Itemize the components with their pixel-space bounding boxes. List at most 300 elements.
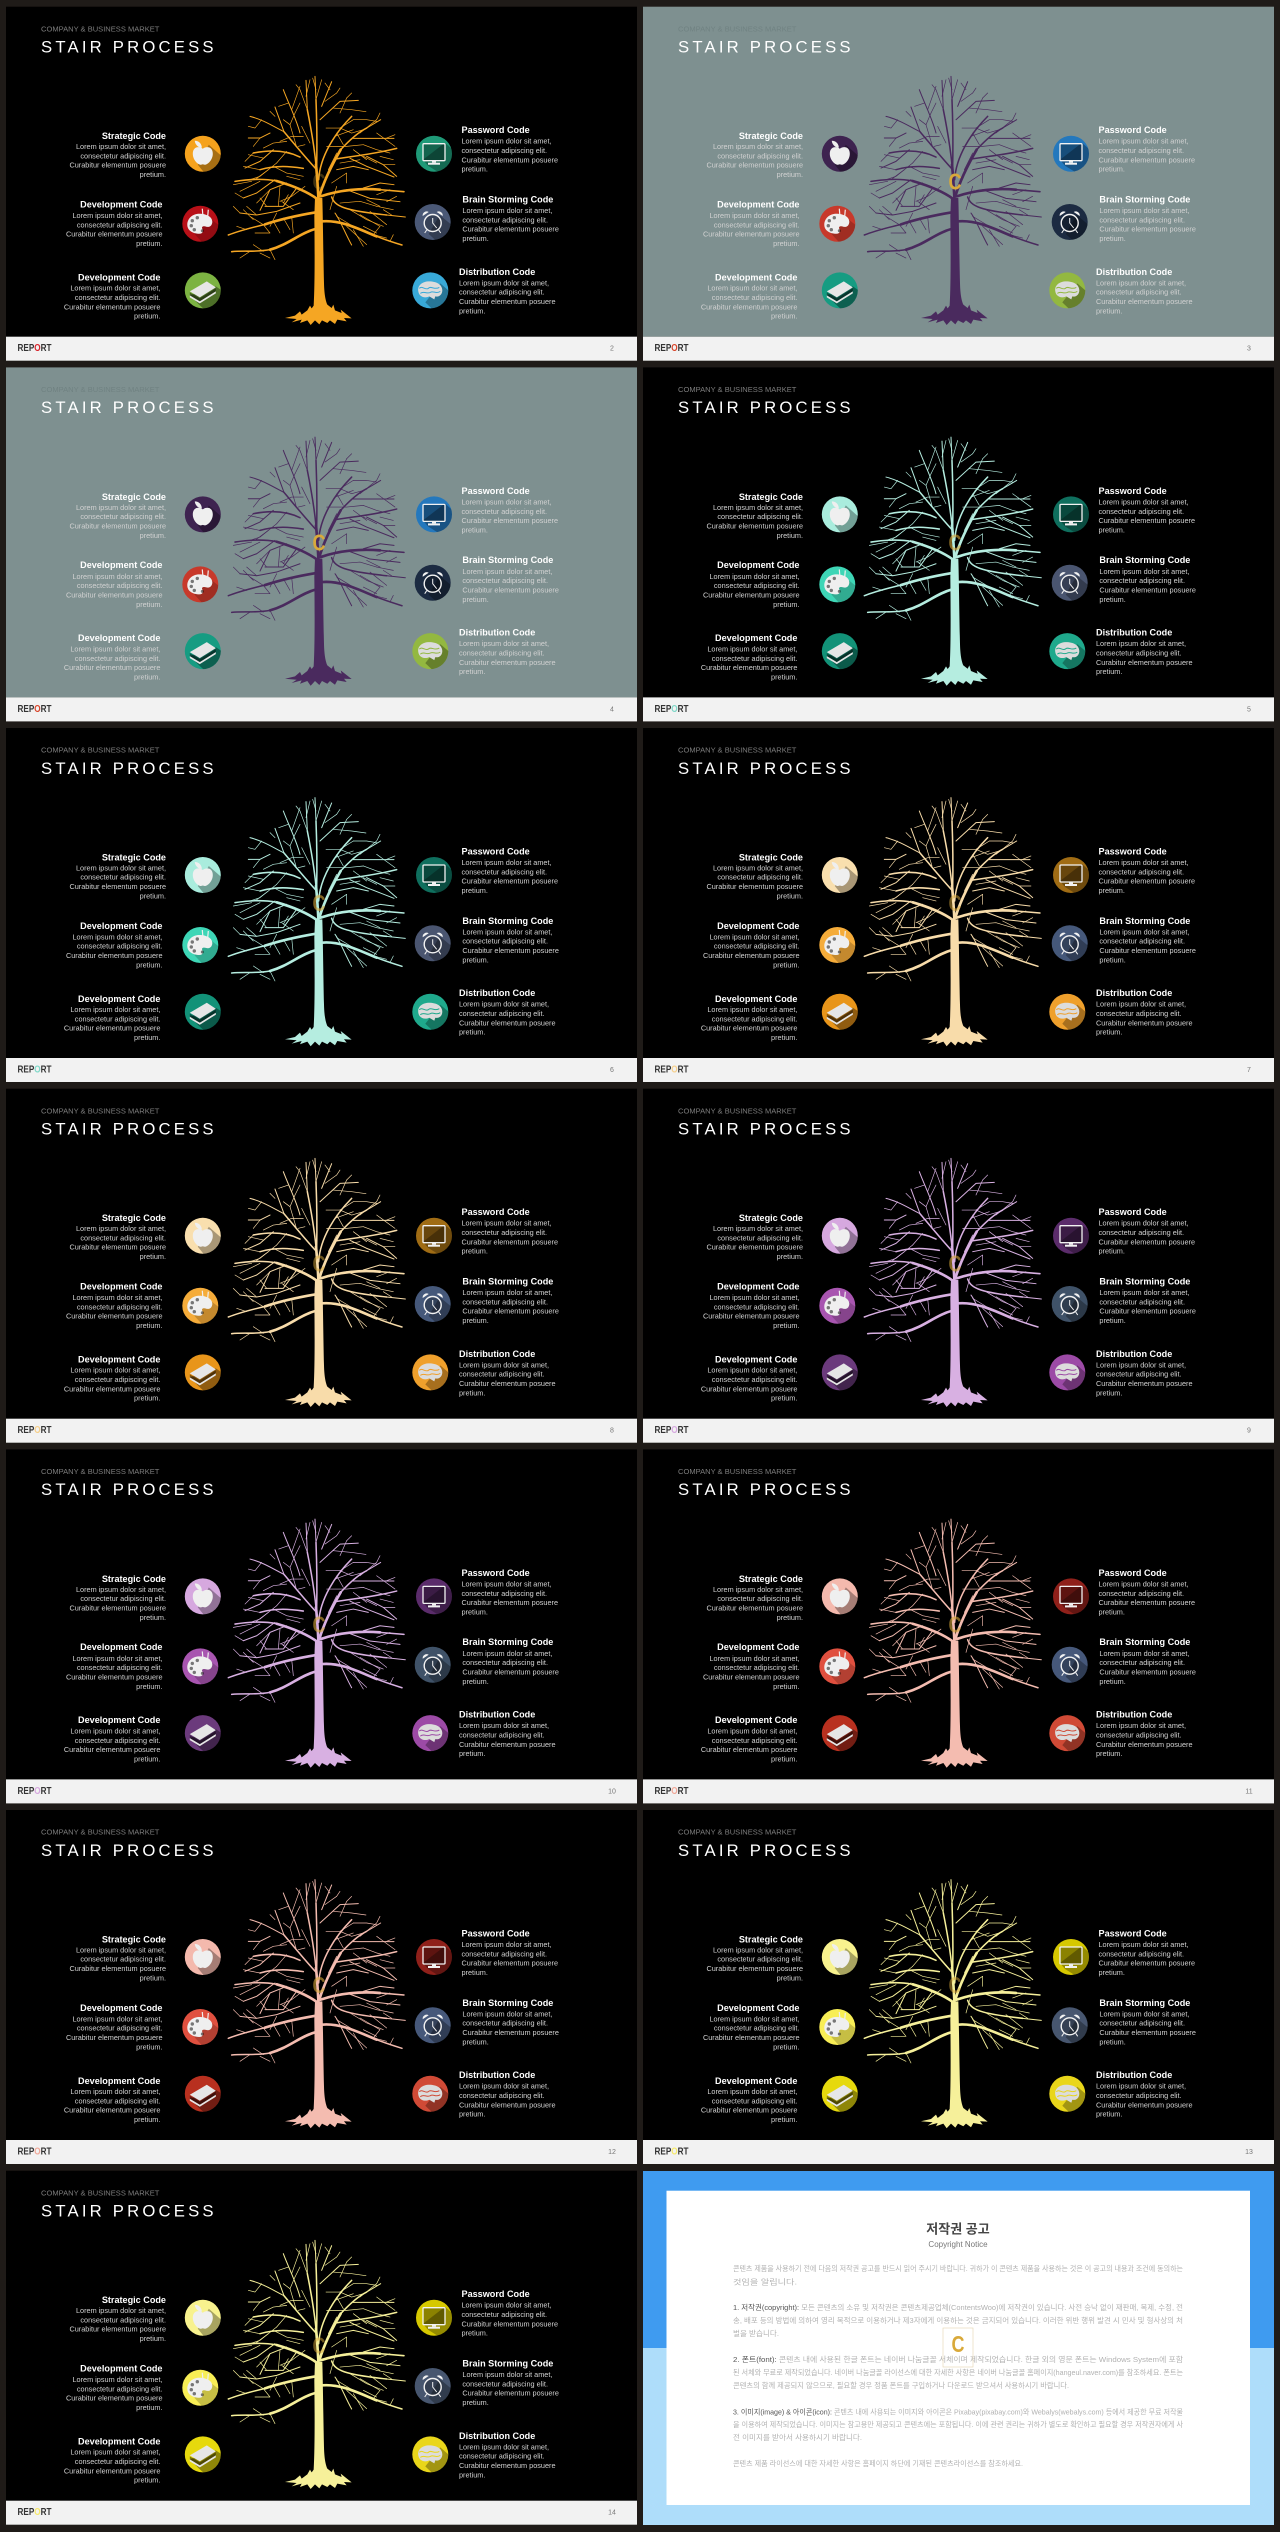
text: Distribution Code: pretium. <box>459 1749 485 1758</box>
text: Distribution Code: Curabitur elementum posuere <box>1096 1018 1193 1027</box>
text: Development Code: Lorem ipsum dolor sit amet, <box>72 1293 162 1302</box>
text: Distribution Code: consectetur adipiscing elit. <box>459 1009 545 1018</box>
text: Brain Storming Code: consectetur adipiscing elit. <box>462 2379 548 2388</box>
icon: book <box>822 272 874 324</box>
kicker: COMPANY & BUSINESS MARKET <box>41 1467 160 1476</box>
icon: monitor <box>416 1578 466 1628</box>
footer bar <box>6 697 637 721</box>
notice body text: 콘텐츠의 함께 제공되지 않으므로, 필요할 경우 정품 폰트를 구입하거나 다운로드 받으셔서 사용하시기 바랍니다. <box>733 2381 1069 2390</box>
text: Strategic Code: pretium. <box>777 1252 803 1261</box>
text: Password Code: consectetur adipiscing elit. <box>1098 1949 1184 1958</box>
text: Brain Storming Code: pretium. <box>1099 2037 1126 2046</box>
kicker: COMPANY & BUSINESS MARKET <box>678 746 797 755</box>
text: Development Code: Lorem ipsum dolor sit amet, <box>72 211 162 220</box>
notice body text: 콘텐츠 제품을 사용하기 전에 다음의 저작권 공고를 반드시 읽어 주시기 바랍니다. 귀하가 이 콘텐츠 제품을 사용하는 것은 이 공고의 내용과 조건에 동의하는 <box>733 2264 1183 2273</box>
text: Brain Storming Code: consectetur adipiscing elit. <box>1099 1297 1185 1306</box>
text: Password Code: pretium. <box>462 1607 488 1616</box>
text: Distribution Code: Distribution Code <box>459 1710 535 1720</box>
tree <box>228 1880 405 2128</box>
text: Development Code: Lorem ipsum dolor sit amet, <box>70 284 160 293</box>
icon: clock <box>1052 1647 1100 1697</box>
icon: brain <box>412 2076 462 2128</box>
text: Distribution Code: Distribution Code <box>459 2070 535 2080</box>
icon: palette <box>819 206 869 256</box>
title: STAIR PROCESS <box>41 398 217 417</box>
kicker: COMPANY & BUSINESS MARKET <box>678 1467 797 1476</box>
text: Password Code: Password Code <box>1098 1568 1167 1578</box>
text: Password Code: Password Code <box>1098 125 1167 135</box>
title: STAIR PROCESS <box>678 1480 854 1499</box>
text: Brain Storming Code: Curabitur elementum posuere <box>462 1667 559 1676</box>
footer bar <box>643 337 1274 361</box>
text: Password Code: Lorem ipsum dolor sit amet, <box>462 1579 552 1588</box>
text: Password Code: Curabitur elementum posuere <box>1098 1598 1195 1607</box>
text: Strategic Code: Lorem ipsum dolor sit amet, <box>713 863 803 872</box>
icon: palette <box>182 566 232 616</box>
text: Password Code: pretium. <box>462 886 488 895</box>
text: Development Code: pretium. <box>136 2042 162 2051</box>
icon: brain <box>1049 633 1099 685</box>
text: Distribution Code: consectetur adipiscing elit. <box>459 1370 545 1379</box>
slide 14: yellow tree <box>6 2171 637 2525</box>
slide background <box>6 1810 637 2140</box>
text: Development Code: Curabitur elementum posuere <box>703 230 800 239</box>
text: Password Code: consectetur adipiscing elit. <box>1098 507 1184 516</box>
text: Brain Storming Code: pretium. <box>462 595 489 604</box>
text: Distribution Code: Curabitur elementum posuere <box>1096 297 1193 306</box>
text: Development Code: pretium. <box>771 312 797 321</box>
text: Development Code: Development Code <box>715 1354 797 1364</box>
blue background bottom <box>643 2348 1274 2525</box>
text: Password Code: consectetur adipiscing elit. <box>1098 867 1184 876</box>
notice body text: 것임을 알립니다. <box>733 2278 797 2286</box>
text: Development Code: Development Code <box>80 200 162 210</box>
text: Development Code: pretium. <box>773 2042 800 2051</box>
text: Development Code: consectetur adipiscing elit. <box>714 942 800 951</box>
text: Development Code: consectetur adipiscing elit. <box>77 1663 162 1672</box>
icon: apple <box>185 1578 235 1628</box>
icon: apple <box>822 496 872 546</box>
text: Distribution Code: Curabitur elementum posuere <box>1096 1379 1193 1388</box>
slide background <box>6 1449 637 1779</box>
notice subtitle: Copyright Notice <box>928 2240 988 2249</box>
text: Distribution Code: pretium. <box>1096 1749 1122 1758</box>
text: Development Code: Development Code <box>717 560 800 570</box>
text: Brain Storming Code: Brain Storming Code <box>462 555 553 565</box>
text: Distribution Code: Lorem ipsum dolor sit amet, <box>459 639 549 648</box>
text: Password Code: Lorem ipsum dolor sit amet, <box>1098 497 1189 506</box>
footer label: REPORT <box>18 1786 52 1797</box>
text: Password Code: consectetur adipiscing elit. <box>1098 146 1184 155</box>
emblem: C <box>312 169 326 195</box>
text: Distribution Code: Lorem ipsum dolor sit amet, <box>1096 1360 1186 1369</box>
slide background <box>643 728 1274 1058</box>
text: Strategic Code: consectetur adipiscing elit. <box>717 873 803 882</box>
icon: palette <box>819 927 869 977</box>
text: Development Code: Development Code <box>717 921 800 931</box>
text: Password Code: consectetur adipiscing elit. <box>1098 1228 1184 1237</box>
text: Development Code: Curabitur elementum posuere <box>701 1745 797 1754</box>
footer bar <box>643 1058 1274 1082</box>
text: Distribution Code: Lorem ipsum dolor sit amet, <box>1096 278 1186 287</box>
text: Distribution Code: pretium. <box>459 306 485 315</box>
text: Development Code: Development Code <box>80 1642 162 1652</box>
text: Distribution Code: Curabitur elementum posuere <box>459 658 556 667</box>
text: Brain Storming Code: consectetur adipiscing elit. <box>462 937 548 946</box>
text: Distribution Code: consectetur adipiscing elit. <box>1096 1370 1182 1379</box>
text: Development Code: consectetur adipiscing elit. <box>712 1736 797 1745</box>
notice body text: 된 서체와 무료로 제작되었습니다. 네이버 나눔글꼴 라이선스에 대한 자세한 사항은 네이버 나눔글꼴 홈페이지(hangeul.naver.com)를 참조하세요. 폰트는 <box>733 2368 1183 2377</box>
footer bar <box>643 2140 1274 2164</box>
kicker: COMPANY & BUSINESS MARKET <box>678 1828 797 1837</box>
text: Brain Storming Code: consectetur adipiscing elit. <box>462 1297 548 1306</box>
text: Distribution Code: Lorem ipsum dolor sit amet, <box>459 1000 549 1009</box>
text: Development Code: Curabitur elementum posuere <box>701 1024 797 1033</box>
text: Strategic Code: pretium. <box>777 1613 803 1622</box>
text: Brain Storming Code: Brain Storming Code <box>462 1637 553 1647</box>
text: Development Code: Curabitur elementum posuere <box>64 1024 160 1033</box>
text: Brain Storming Code: pretium. <box>1099 234 1126 243</box>
title: STAIR PROCESS <box>678 759 854 778</box>
text: Development Code: Lorem ipsum dolor sit amet, <box>707 1366 797 1375</box>
text: Development Code: Curabitur elementum posuere <box>64 1745 160 1754</box>
slide 2: orange tree <box>6 7 637 361</box>
icon: clock <box>415 925 463 975</box>
emblem: C <box>312 1972 326 1998</box>
title: STAIR PROCESS <box>678 398 854 417</box>
text: Strategic Code: Strategic Code <box>102 2295 166 2305</box>
icon: apple <box>822 857 872 907</box>
text: Strategic Code: pretium. <box>140 891 166 900</box>
icon: clock <box>415 2368 463 2418</box>
text: Development Code: Lorem ipsum dolor sit amet, <box>709 2014 800 2023</box>
text: Strategic Code: pretium. <box>777 1973 803 1982</box>
text: Development Code: Lorem ipsum dolor sit amet, <box>707 1005 797 1014</box>
text: Password Code: consectetur adipiscing elit. <box>462 2310 547 2319</box>
icon: brain <box>1049 272 1099 324</box>
text: Development Code: Curabitur elementum posuere <box>703 590 800 599</box>
icon: brain <box>412 994 462 1046</box>
text: Brain Storming Code: consectetur adipiscing elit. <box>462 2019 548 2028</box>
text: Strategic Code: Lorem ipsum dolor sit amet, <box>713 142 803 151</box>
text: Strategic Code: Strategic Code <box>102 1213 166 1223</box>
icon: book <box>185 1715 237 1767</box>
text: Development Code: Lorem ipsum dolor sit amet, <box>707 2087 797 2096</box>
title: STAIR PROCESS <box>41 1841 217 1860</box>
text: Development Code: Development Code <box>717 1281 800 1291</box>
text: Development Code: pretium. <box>136 960 162 969</box>
text: Development Code: Development Code <box>78 994 160 1004</box>
text: Development Code: Curabitur elementum posuere <box>66 590 162 599</box>
text: Brain Storming Code: Curabitur elementum posuere <box>1099 1667 1196 1676</box>
text: Development Code: pretium. <box>773 1321 800 1330</box>
text: Distribution Code: consectetur adipiscing elit. <box>1096 288 1182 297</box>
text: Password Code: Password Code <box>462 125 530 135</box>
text: Development Code: Development Code <box>715 2076 797 2086</box>
text: Development Code: Lorem ipsum dolor sit amet, <box>70 1005 160 1014</box>
kicker: COMPANY & BUSINESS MARKET <box>41 1828 160 1837</box>
page number: 12 <box>608 2149 616 2156</box>
text: Brain Storming Code: consectetur adipiscing elit. <box>462 576 548 585</box>
text: Password Code: Curabitur elementum posuere <box>462 1959 558 1968</box>
text: Brain Storming Code: Lorem ipsum dolor sit amet, <box>462 1288 552 1297</box>
text: Distribution Code: Lorem ipsum dolor sit amet, <box>459 2442 549 2451</box>
text: Strategic Code: pretium. <box>777 170 803 179</box>
text: Brain Storming Code: consectetur adipiscing elit. <box>1099 576 1185 585</box>
text: Password Code: consectetur adipiscing elit. <box>462 1589 547 1598</box>
footer bar <box>6 1779 637 1803</box>
page number: 14 <box>608 2510 616 2517</box>
text: Brain Storming Code: Lorem ipsum dolor sit amet, <box>1099 2009 1189 2018</box>
text: Distribution Code: Lorem ipsum dolor sit amet, <box>1096 2082 1186 2091</box>
text: Development Code: Curabitur elementum posuere <box>66 1312 162 1321</box>
notice body text: 전 이미지를 받아서 사용하시기 바랍니다. <box>733 2433 862 2442</box>
slide 10: lilac tree <box>6 1449 637 1803</box>
icon: monitor <box>416 2300 466 2350</box>
text: Strategic Code: consectetur adipiscing elit. <box>717 1233 803 1242</box>
text: Development Code: Development Code <box>715 272 797 282</box>
footer label: REPORT <box>654 1064 688 1076</box>
text: Password Code: pretium. <box>1098 886 1125 895</box>
text: Strategic Code: pretium. <box>140 1252 166 1261</box>
text: Password Code: pretium. <box>462 1968 488 1977</box>
kicker: COMPANY & BUSINESS MARKET <box>41 1106 160 1115</box>
text: Distribution Code: Curabitur elementum posuere <box>1096 2100 1193 2109</box>
page number: 9 <box>1247 1428 1251 1435</box>
text: Development Code: Development Code <box>80 2363 162 2373</box>
text: Brain Storming Code: consectetur adipiscing elit. <box>1099 2019 1185 2028</box>
text: Strategic Code: Lorem ipsum dolor sit amet, <box>713 1945 803 1954</box>
text: Development Code: Curabitur elementum posuere <box>701 1384 797 1393</box>
page number: 3 <box>1247 346 1251 353</box>
icon: monitor <box>416 1218 466 1268</box>
text: Development Code: Lorem ipsum dolor sit amet, <box>709 1293 800 1302</box>
footer label: REPORT <box>654 1786 688 1797</box>
tree <box>228 798 405 1046</box>
white panel <box>666 2191 1250 2505</box>
text: Development Code: Development Code <box>78 2076 160 2086</box>
text: Brain Storming Code: Curabitur elementum posuere <box>1099 1307 1196 1316</box>
text: Distribution Code: Curabitur elementum posuere <box>459 1740 556 1749</box>
icon: apple <box>822 136 872 186</box>
text: Development Code: pretium. <box>134 1754 160 1763</box>
text: Password Code: Lorem ipsum dolor sit amet, <box>462 497 552 506</box>
icon: monitor <box>1053 496 1103 546</box>
text: Password Code: consectetur adipiscing elit. <box>462 867 547 876</box>
text: Brain Storming Code: pretium. <box>462 2398 489 2407</box>
text: Brain Storming Code: Curabitur elementum posuere <box>1099 946 1196 955</box>
slide 13: yellow tree <box>643 1810 1274 2164</box>
emblem: C <box>312 1611 326 1637</box>
text: Brain Storming Code: Brain Storming Code <box>462 916 553 926</box>
icon: monitor <box>1053 136 1103 186</box>
text: Development Code: consectetur adipiscing elit. <box>75 2096 160 2105</box>
text: Strategic Code: consectetur adipiscing elit. <box>80 1233 166 1242</box>
icon: palette <box>819 1288 869 1338</box>
text: Development Code: Curabitur elementum posuere <box>66 1672 162 1681</box>
title: STAIR PROCESS <box>678 1119 854 1138</box>
text: Brain Storming Code: Brain Storming Code <box>462 195 553 205</box>
tree <box>864 1519 1041 1768</box>
text: Distribution Code: pretium. <box>459 2470 485 2479</box>
text: Strategic Code: Lorem ipsum dolor sit amet, <box>76 1224 166 1233</box>
emblem: C <box>312 2333 326 2359</box>
emblem: C <box>948 1972 962 1998</box>
text: Distribution Code: Curabitur elementum posuere <box>459 2461 556 2470</box>
icon: apple <box>185 857 235 907</box>
blue background top <box>643 2171 1274 2348</box>
text: Development Code: pretium. <box>773 600 800 609</box>
text: Distribution Code: pretium. <box>459 2110 485 2119</box>
text: Development Code: pretium. <box>771 1754 797 1763</box>
text: Development Code: Development Code <box>80 2003 162 2013</box>
notice body text: 송, 배포 등의 방법에 의하여 영리 목적으로 이용하거나 제3자에게 이용하는 것은 금지되어 있습니다. 이러한 위반 행위 발견 시 민사 및 형사상의 처 <box>733 2316 1183 2325</box>
text: Password Code: Password Code <box>462 2289 530 2299</box>
text: Password Code: consectetur adipiscing elit. <box>462 507 547 516</box>
text: Password Code: Curabitur elementum posuere <box>1098 155 1195 164</box>
icon: clock <box>1052 1286 1100 1336</box>
text: Development Code: consectetur adipiscing elit. <box>712 1014 797 1023</box>
text: Password Code: Password Code <box>1098 486 1167 496</box>
text: Brain Storming Code: Curabitur elementum posuere <box>462 1307 559 1316</box>
text: Brain Storming Code: Brain Storming Code <box>1099 1998 1190 2008</box>
text: Password Code: pretium. <box>1098 1247 1125 1256</box>
text: Strategic Code: consectetur adipiscing elit. <box>80 2315 166 2324</box>
icon: brain <box>1049 1354 1099 1406</box>
text: Development Code: pretium. <box>134 672 160 681</box>
text: Strategic Code: Strategic Code <box>102 131 166 141</box>
text: Development Code: consectetur adipiscing elit. <box>75 1736 160 1745</box>
text: Distribution Code: pretium. <box>1096 1028 1122 1037</box>
icon: brain <box>412 1354 462 1406</box>
text: Strategic Code: Curabitur elementum posuere <box>706 161 803 170</box>
text: Brain Storming Code: Brain Storming Code <box>1099 1276 1190 1286</box>
text: Distribution Code: Distribution Code <box>1096 1349 1172 1359</box>
emblem <box>943 2328 973 2367</box>
footer bar <box>6 1419 637 1443</box>
emblem: C <box>312 890 326 916</box>
text: Development Code: consectetur adipiscing elit. <box>77 581 162 590</box>
text: Password Code: pretium. <box>1098 1968 1125 1977</box>
text: Distribution Code: Lorem ipsum dolor sit amet, <box>1096 1721 1186 1730</box>
text: Development Code: consectetur adipiscing elit. <box>712 654 797 663</box>
text: Brain Storming Code: consectetur adipiscing elit. <box>1099 215 1185 224</box>
text: Strategic Code: Lorem ipsum dolor sit amet, <box>76 142 166 151</box>
text: Strategic Code: pretium. <box>777 891 803 900</box>
page number: 13 <box>1245 2149 1253 2156</box>
text: Development Code: Curabitur elementum posuere <box>64 2106 160 2115</box>
text: Password Code: pretium. <box>1098 525 1125 534</box>
slide background <box>6 728 637 1058</box>
text: Development Code: Curabitur elementum posuere <box>64 302 160 311</box>
text: Password Code: Lorem ipsum dolor sit amet, <box>462 1219 552 1228</box>
notice body text <box>733 2264 1183 2468</box>
text: Development Code: Development Code <box>80 1281 162 1291</box>
text: Strategic Code: pretium. <box>140 170 166 179</box>
text: Brain Storming Code: Brain Storming Code <box>1099 555 1190 565</box>
footer bar <box>643 1419 1274 1443</box>
text: Brain Storming Code: Brain Storming Code <box>462 1998 553 2008</box>
tree <box>864 798 1041 1046</box>
text: Distribution Code: Lorem ipsum dolor sit amet, <box>459 278 549 287</box>
text: Password Code: Password Code <box>462 486 530 496</box>
notice body text: 2. 폰트(font): 콘텐츠 내에 사용된 한글 폰트는 네이버 나눔글꼴 서체이며 제작되었습니다. 한글 외의 영문 폰트는 Windows System에 포함 <box>733 2355 1183 2364</box>
text: Password Code: pretium. <box>462 165 488 174</box>
tree <box>228 437 405 686</box>
kicker: COMPANY & BUSINESS MARKET <box>678 24 797 33</box>
text: Strategic Code: Lorem ipsum dolor sit amet, <box>76 1585 166 1594</box>
icon: brain <box>412 1715 462 1767</box>
text: Strategic Code: Strategic Code <box>739 1934 803 1944</box>
text: Distribution Code: Distribution Code <box>459 988 535 998</box>
text: Strategic Code: Lorem ipsum dolor sit amet, <box>713 503 803 512</box>
text: Strategic Code: Lorem ipsum dolor sit amet, <box>76 503 166 512</box>
emblem: C <box>948 1611 962 1637</box>
text: Distribution Code: consectetur adipiscing elit. <box>1096 1730 1182 1739</box>
text: Strategic Code: Curabitur elementum posuere <box>69 1603 166 1612</box>
text: Brain Storming Code: Lorem ipsum dolor sit amet, <box>1099 567 1189 576</box>
text: Distribution Code: Curabitur elementum posuere <box>459 1379 556 1388</box>
text: Strategic Code: consectetur adipiscing elit. <box>80 512 166 521</box>
text: Brain Storming Code: Lorem ipsum dolor sit amet, <box>1099 1649 1189 1658</box>
text: Distribution Code: consectetur adipiscing elit. <box>459 2091 545 2100</box>
icon: palette <box>182 1288 232 1338</box>
text: Strategic Code: consectetur adipiscing elit. <box>80 1594 166 1603</box>
text: Development Code: pretium. <box>773 239 800 248</box>
text: Password Code: Password Code <box>1098 846 1167 856</box>
icon: monitor <box>1053 1218 1103 1268</box>
slide background <box>643 367 1274 697</box>
footer label: REPORT <box>18 343 52 354</box>
text: Password Code: Lorem ipsum dolor sit amet, <box>1098 137 1189 146</box>
text: Password Code: Lorem ipsum dolor sit amet, <box>462 137 552 146</box>
text: Brain Storming Code: pretium. <box>462 955 489 964</box>
icon: apple <box>185 1218 235 1268</box>
text: Development Code: consectetur adipiscing elit. <box>712 2096 797 2105</box>
text: Distribution Code: Distribution Code <box>1096 2070 1172 2080</box>
text: Password Code: Lorem ipsum dolor sit amet, <box>1098 1219 1189 1228</box>
text: Distribution Code: pretium. <box>1096 1388 1122 1397</box>
text: Brain Storming Code: pretium. <box>462 2037 489 2046</box>
text: Password Code: Curabitur elementum posuere <box>462 155 558 164</box>
slide background <box>6 2171 637 2501</box>
text: Development Code: Lorem ipsum dolor sit amet, <box>72 572 162 581</box>
text: Development Code: Curabitur elementum posuere <box>66 2394 162 2403</box>
page number: 8 <box>610 1428 614 1435</box>
footer label: REPORT <box>18 1064 52 1076</box>
kicker: COMPANY & BUSINESS MARKET <box>41 746 160 755</box>
icon: palette <box>182 1648 232 1698</box>
text: Strategic Code: Lorem ipsum dolor sit amet, <box>713 1585 803 1594</box>
icon: apple <box>822 1578 872 1628</box>
text: Development Code: Curabitur elementum posuere <box>701 663 797 672</box>
footer label: REPORT <box>654 2146 688 2158</box>
kicker: COMPANY & BUSINESS MARKET <box>41 24 160 33</box>
footer bar <box>643 1779 1274 1803</box>
text: Distribution Code: consectetur adipiscing elit. <box>1096 2091 1182 2100</box>
icon: monitor <box>1053 857 1103 907</box>
text: Development Code: pretium. <box>134 1394 160 1403</box>
text: Development Code: pretium. <box>136 239 162 248</box>
text: Password Code: consectetur adipiscing elit. <box>462 1949 547 1958</box>
text: Strategic Code: Curabitur elementum posuere <box>706 521 803 530</box>
slide 6: mint tree <box>6 728 637 1082</box>
text: Brain Storming Code: Curabitur elementum posuere <box>462 2389 559 2398</box>
icon: clock <box>415 565 463 615</box>
emblem: C <box>948 529 962 555</box>
text: Distribution Code: Curabitur elementum posuere <box>459 297 556 306</box>
text: Development Code: pretium. <box>773 1682 800 1691</box>
